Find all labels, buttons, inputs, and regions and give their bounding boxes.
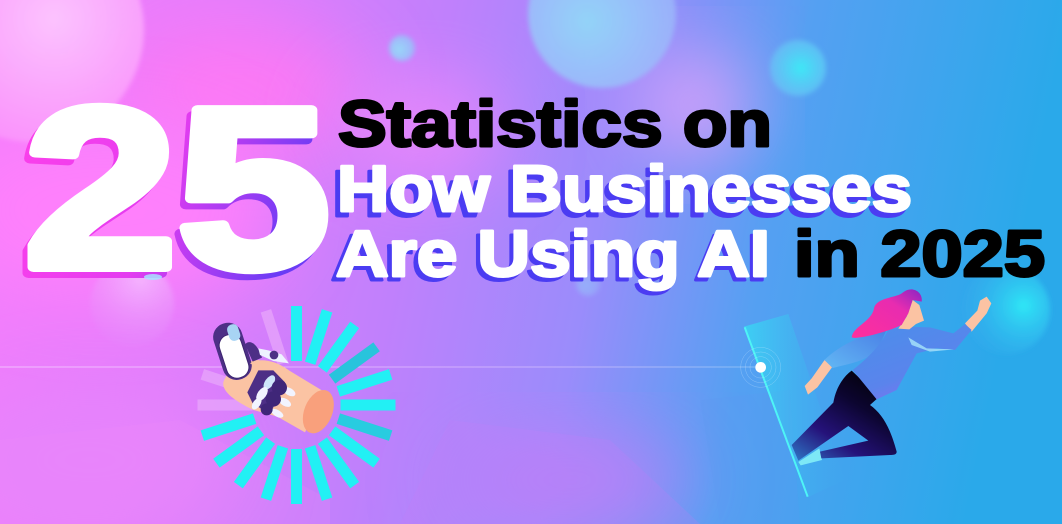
background bubbles — [0, 0, 1050, 354]
shoe — [798, 448, 822, 465]
back arm hand — [805, 359, 832, 395]
forearm cut end — [297, 385, 340, 438]
back arm — [824, 329, 887, 368]
title line: Statistics on: Statistics on — [338, 87, 772, 160]
lower background shapes — [0, 390, 800, 524]
signal dot — [755, 362, 766, 373]
background glows — [0, 30, 745, 524]
palm band — [250, 360, 290, 378]
thumb — [258, 348, 289, 363]
torso and front arm — [853, 324, 972, 399]
title line: Are Using AI: Are Using AI — [331, 221, 767, 294]
sweater highlight — [908, 337, 954, 352]
title line: How Businesses: How Businesses — [337, 152, 912, 225]
title line: in 2025: in 2025 — [794, 217, 1045, 290]
glove — [247, 370, 285, 414]
top glove piece — [245, 342, 262, 362]
icon: running woman — [792, 289, 991, 465]
front forearm and hand — [965, 297, 991, 332]
headline number 25: 25 — [24, 62, 330, 316]
icon: glowing door panel — [741, 314, 845, 497]
face and neck — [898, 300, 924, 329]
signal rings — [741, 347, 781, 387]
icon: radial loading rays — [198, 306, 396, 504]
title line: Are Using AI: Are Using AI — [336, 217, 770, 290]
robotic fingertip — [209, 319, 255, 384]
light finger segments — [250, 373, 277, 411]
knuckles — [261, 380, 287, 415]
thumb joint — [270, 351, 278, 359]
icon: robotic hand — [209, 319, 340, 438]
horizontal guide line — [0, 366, 760, 368]
legs — [792, 371, 897, 461]
title line: How Businesses: How Businesses — [332, 157, 908, 230]
headline number 25: 25 — [19, 68, 325, 322]
glow spot on 25 — [144, 274, 162, 280]
forearm — [223, 360, 324, 432]
white finger segments — [270, 385, 297, 420]
hair — [852, 289, 922, 338]
